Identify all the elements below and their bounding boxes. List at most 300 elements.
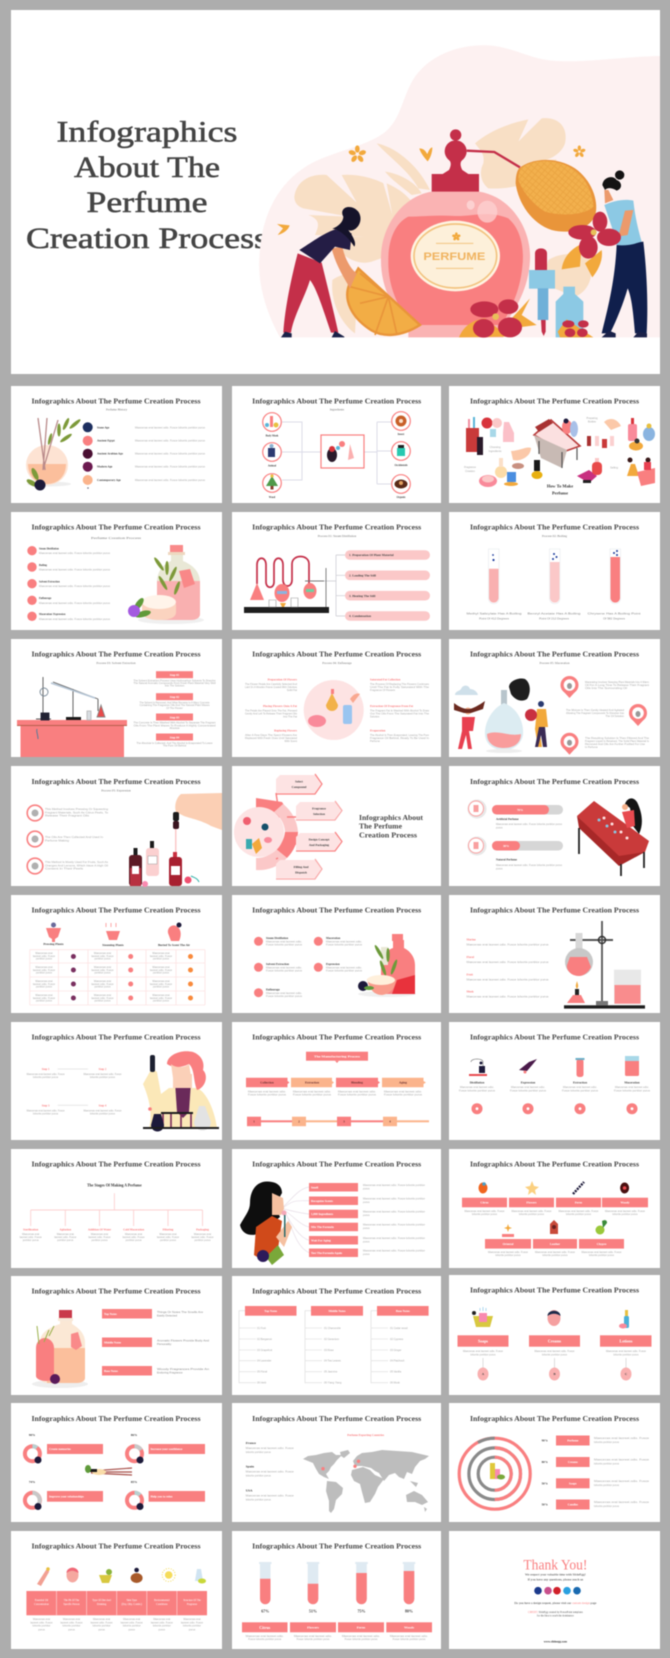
timeline item list: Maecenas erat laoreet odio. Fusce lobortis porttitor purus — [135, 465, 206, 469]
text entries: Musk — [466, 990, 474, 994]
method labels: Extraction — [573, 1081, 587, 1085]
left source icons: Body Musk — [266, 434, 279, 438]
note buttons: Aromatic Flowers Provide Body And — [157, 1338, 209, 1342]
comparison grid: Maecenas erat — [152, 965, 170, 969]
family buttons: Maecenas erat laoreet odio. Fusce — [605, 1209, 646, 1213]
numbered timeline: 4 — [389, 1120, 391, 1124]
test tube 67 percent — [259, 1562, 272, 1614]
step texts: lobortis porttitor purus — [90, 1075, 116, 1079]
numbered timeline: 2 — [298, 1120, 300, 1124]
tube captions: Point Of 212 Degrees — [539, 616, 569, 620]
step buttons: 1,000 Ingredients — [311, 1212, 334, 1216]
pin icons and texts — [560, 676, 650, 755]
comparison grid: Maecenas erat — [94, 993, 111, 997]
step texts: Maecenas erat laoreet odio. Fusce — [84, 1108, 122, 1112]
family buttons: Ferns — [575, 1200, 583, 1204]
category buttons: Maecenas erat laoreet odio. — [342, 1634, 380, 1638]
timeline item list: Maecenas erat laoreet odio. Fusce lobortis porttitor purus — [135, 425, 206, 429]
how to make perfume caption: How To Make — [547, 484, 573, 488]
factor descriptions: lobortis porttitor — [93, 1624, 111, 1628]
right process texts: Perfume — [370, 739, 380, 743]
step buttons: purus — [363, 1200, 370, 1204]
slide title: Infographics About The Perfume Creation Process — [32, 777, 201, 786]
connector lines — [282, 422, 391, 484]
hero title: Creation Process — [26, 223, 268, 255]
pin icons and texts: The Mixture Is Then Gently Heated And Agitated — [566, 708, 625, 712]
comparison grid: laoreet odio. Fusce — [150, 968, 173, 972]
red factor grid: Environmental — [154, 1599, 170, 1602]
blue bottle with flower — [556, 287, 593, 337]
factor descriptions — [30, 1617, 204, 1632]
panel: slide 4 perfume creation process — [11, 512, 222, 630]
percent legend rows: Perfume — [567, 1438, 579, 1442]
panel: slide 3 how to make perfume — [449, 386, 660, 503]
percent legend rows: lobortis porttitor purus — [594, 1504, 620, 1508]
product buttons — [458, 1335, 652, 1356]
natural perfume bar: Maecenas erat laoreet odio. Fusce lobortis porttitor purus — [496, 863, 563, 867]
bottle stem and tube — [467, 151, 520, 167]
right process texts: Extraction Of Fragrance From Fat — [370, 704, 413, 708]
panel: slide 9 maceration — [449, 639, 660, 757]
donut 85 percent: Help you to relax — [150, 1494, 173, 1498]
text entries: Fruit — [466, 972, 473, 976]
base notes column — [377, 1306, 429, 1385]
tube captions — [466, 612, 641, 620]
factor descriptions: Maecenas erat — [183, 1617, 201, 1621]
slide title: Infographics About The Perfume Creation Process — [32, 522, 201, 532]
donut 74 percent — [25, 1480, 103, 1510]
method items: Maecenas erat laoreet odio. — [266, 966, 302, 970]
slide title: Infographics About The Perfume Creation Process — [32, 1542, 201, 1550]
woman left — [281, 207, 361, 337]
method labels: Fusce lobortis porttitor purus — [510, 1088, 547, 1092]
social icons — [534, 1587, 581, 1594]
chevron label 2: Fragrance — [312, 806, 326, 810]
four process segments: Blending — [351, 1080, 363, 1084]
country text blocks: Maecenas erat laoreet odio. Fusce — [246, 1494, 294, 1498]
donut 86 percent: Increase your confidence — [150, 1447, 183, 1451]
test tube 75 percent — [355, 1562, 368, 1614]
natural perfume bar — [468, 836, 563, 870]
chevron label 1: Compound — [292, 785, 307, 789]
slide title: Infographics About The Perfume Creation Process — [252, 1160, 421, 1168]
artificial perfume bar: 70% — [517, 808, 523, 812]
percent legend rows: 50% — [542, 1481, 548, 1485]
donut 86 percent: 86% — [131, 1433, 137, 1437]
slide title: Infographics About The Perfume Creation Process — [252, 522, 421, 532]
test tube 1 — [488, 549, 499, 604]
comparison grid: Maecenas erat — [94, 951, 111, 955]
figure left with flowers — [454, 701, 485, 749]
step buttons: Wait For Aging — [311, 1238, 331, 1242]
timeline item list: Modern Age — [97, 465, 113, 469]
tree labels: porttitor purus — [23, 1238, 39, 1242]
distillation apparatus — [244, 556, 329, 613]
family buttons: Maecenas erat laoreet odio. Fusce — [535, 1250, 576, 1254]
note buttons: Personality — [157, 1342, 172, 1346]
tree labels: Agitation — [60, 1228, 71, 1232]
step texts: Maecenas erat laoreet odio. Fusce — [27, 1072, 65, 1076]
country text blocks: USA — [246, 1488, 253, 1492]
pendant letter markers: A — [482, 1372, 485, 1376]
process step list: Solvent Extraction — [39, 580, 60, 584]
donut 90 percent — [25, 1433, 103, 1464]
right process texts: Fragrance Oil Behind, Ready To Be Used In — [370, 736, 430, 740]
panel: slide 26 exporting countries map — [232, 1403, 441, 1522]
method items: Enfleurage — [266, 988, 280, 992]
comparison grid: laoreet odio. Fusce — [91, 954, 114, 958]
tree labels: laoreet odio. Fusce — [88, 1235, 111, 1239]
slide title: Infographics About The Perfume Creation Process — [32, 1160, 201, 1168]
chevron label 4: Filling And — [294, 865, 309, 869]
thank you heading: Thank You! — [523, 1558, 587, 1574]
panel: slide 23 notes lists — [232, 1276, 441, 1395]
tree labels: Maecenas erat — [194, 1232, 211, 1236]
factor descriptions: laoreet odio. Fusce — [151, 1620, 173, 1624]
step buttons: Maecenas erat laoreet odio. Fusce lobortis porttitor — [363, 1223, 425, 1227]
panel: slide 6 boiling — [449, 512, 660, 630]
step texts: Step 4 — [99, 1103, 107, 1107]
slide title: Infographics About The Perfume Creation Process — [32, 1414, 201, 1423]
middle notes column — [311, 1306, 363, 1385]
factor descriptions: purus — [68, 1628, 75, 1632]
comparison grid: laoreet odio. Fusce — [150, 982, 173, 986]
thank you message: We respect your valuable time with SlideEgg! — [525, 1572, 586, 1576]
percent legend rows: lobortis porttitor purus — [594, 1440, 620, 1444]
numbered timeline: 1 — [253, 1120, 255, 1124]
middle notes column: 02 Geranium — [324, 1337, 339, 1341]
red factor grid: Fragrance — [187, 1603, 198, 1606]
process step list: Boiling — [39, 564, 48, 567]
subtitle: Process 05: Maceration — [540, 661, 570, 665]
note buttons: Easily Detected — [157, 1314, 177, 1318]
timeline item list: Ancient Arabian Age — [97, 452, 124, 456]
right source icons: Occidentals — [395, 464, 407, 467]
method items: Steam Distillation — [266, 936, 288, 940]
family buttons: Maecenas erat laoreet odio. Fusce — [512, 1209, 552, 1213]
factor descriptions: purus — [128, 1628, 136, 1632]
panel: slide 29 test tube chart — [232, 1531, 441, 1649]
test tube 51 percent — [307, 1562, 319, 1614]
right process texts: The Alcohol Is Then Evaporated, Leaving The Pure — [370, 733, 430, 737]
red factor grid: (Dry, Oily, Combo) — [122, 1603, 142, 1606]
panel: slide 8 enfleurage — [232, 639, 441, 757]
step pills: 3. Heating The Still — [349, 594, 375, 598]
subtitle: Ingredients — [330, 408, 345, 412]
subtitle: Process 05: Expression — [101, 788, 131, 792]
tube captions: Point Of 412 Degrees — [479, 616, 509, 620]
family buttons: Maecenas erat laoreet odio. Fusce — [582, 1250, 622, 1254]
isometric perfume scene right — [577, 418, 655, 486]
comparison grid: laoreet odio. Fusce — [150, 954, 173, 958]
method labels: Distillation — [470, 1081, 485, 1085]
country text blocks — [246, 1441, 294, 1502]
orange slice — [347, 268, 420, 335]
product buttons: Maecenas erat laoreet odio. Fusce — [534, 1349, 575, 1353]
hero title: About The — [74, 152, 220, 184]
step buttons: Maecenas erat laoreet odio. Fusce lobortis porttitor — [363, 1210, 425, 1214]
text entries: Maecenas erat laoreet odio. Fusce lobortis porttitor purus — [466, 943, 549, 947]
red factor grid: Conditions — [156, 1603, 167, 1606]
category buttons: Fusce lobortis porttitor purus — [345, 1637, 378, 1641]
donut 85 percent — [127, 1480, 205, 1510]
pin icons and texts: The Oil Solution — [606, 714, 625, 718]
website footer: www.slideegg.com — [544, 1640, 568, 1644]
family buttons: Maecenas erat laoreet odio. Fusce — [488, 1250, 529, 1254]
top notes column: 02 Bergamot — [257, 1337, 272, 1341]
text entries: Maecenas erat laoreet odio. Fusce lobortis porttitor purus — [466, 960, 549, 964]
chevron label 3: Design Concept — [309, 838, 330, 842]
panel: slide 5 steam distillation — [232, 512, 441, 630]
circle bullet items: This Method Involves Pressing Or Squeezing — [45, 807, 109, 811]
test tube 3 — [610, 549, 620, 604]
circle bullet items: The Oils Are Then Collected And Used In — [45, 835, 104, 839]
method labels: Maecenas erat laoreet odio. — [563, 1085, 597, 1089]
step pills: 1. Preparation Of Plant Material — [349, 553, 394, 557]
comparison grid: porttitor purus — [153, 985, 170, 989]
pin icons and texts: Oil For A Long Time To Release Their Fragrant — [585, 683, 649, 687]
category buttons: Fusce lobortis porttitor purus — [248, 1637, 282, 1641]
slide title: Infographics About The Perfume Creation Process — [252, 906, 421, 914]
step texts: Maecenas erat laoreet odio. Fusce — [27, 1108, 65, 1112]
tree labels: Maecenas erat — [22, 1232, 40, 1236]
slide title: Infographics About The Perfume Creation Process — [470, 396, 639, 406]
four process segments: Fusce lobortis porttitor purus — [293, 1092, 332, 1096]
product buttons: lobortis porttitor purus — [613, 1352, 639, 1356]
pin icons and texts: Removed And Oils Are Further Purified For Use — [585, 742, 646, 746]
red factor grid: Drinking — [97, 1603, 107, 1606]
chevron label 1: Select — [295, 780, 304, 784]
slide title: Infographics About The Perfume Creation Process — [32, 906, 201, 914]
pendant letter markers: B — [553, 1372, 556, 1376]
how to make perfume caption: Selling — [610, 466, 618, 470]
percent legend rows: Creams — [568, 1460, 579, 1464]
timeline item list: Ancient Egypt — [97, 439, 115, 443]
left process texts: Into The Fat — [283, 714, 297, 718]
note buttons: Woody Fragrances Provide An — [157, 1367, 210, 1371]
credit text: for the Idea to reach the dominance — [537, 1614, 575, 1617]
category buttons: Citrus — [259, 1625, 271, 1630]
artificial perfume bar: Maecenas erat laoreet odio. Fusce lobortis porttitor purus — [496, 822, 563, 826]
percent legend rows — [542, 1436, 650, 1510]
note buttons: Enduring Fragrance — [157, 1370, 183, 1374]
top notes column — [245, 1306, 296, 1385]
chevron label 4 — [276, 859, 322, 879]
category buttons: Flowers — [307, 1626, 320, 1630]
bracket lines — [239, 1311, 388, 1383]
percent legend rows: lobortis porttitor purus — [594, 1462, 620, 1466]
circle bullet items: This Method Is Mostly Used For Fruits, Such As — [45, 860, 109, 864]
process step list — [27, 546, 111, 621]
red factor grid: The Ph Of The — [64, 1599, 80, 1602]
bottle and jar illustration — [358, 934, 416, 997]
tree labels: porttitor purus — [160, 1238, 177, 1242]
process step list: Maceration/ Expression — [39, 613, 66, 616]
step buttons with text: The Natural Aromatic Compounds From Fresh Plant Material Very Well — [134, 681, 216, 685]
method items: Fusce lobortis porttitor purus — [326, 943, 363, 947]
tube captions: Of 582 Degrees — [603, 616, 625, 620]
ring center bottle icon — [490, 1463, 505, 1480]
family buttons: Chypre — [597, 1242, 607, 1246]
donut 86 percent — [127, 1433, 205, 1464]
red factor grid — [26, 1591, 207, 1615]
step buttons: Test The Formula Again — [311, 1251, 342, 1255]
panel: slide 21 fragrance families — [449, 1149, 660, 1268]
left process texts: Replaced With Fresh Ones Until Saturated — [245, 736, 298, 740]
comparison grid: Maecenas erat — [94, 979, 111, 983]
four process segments: Aging — [399, 1080, 407, 1084]
country text blocks: lobortis porttitor purus — [246, 1450, 271, 1454]
percent legend rows: lobortis porttitor purus — [594, 1483, 620, 1487]
comparison grid: laoreet odio. Fusce — [91, 968, 114, 972]
panel: slide 28 six factors — [11, 1531, 222, 1649]
step buttons with text: Step 03 — [170, 716, 180, 720]
comparison grid: Maecenas erat — [35, 979, 53, 983]
pin icons and texts: Oils Into The Surrounding Oil — [585, 686, 628, 690]
column icons and headings: Pressing Plants — [43, 942, 64, 946]
tree labels: porttitor purus — [91, 1238, 108, 1242]
isometric perfume scene left — [466, 417, 542, 487]
panel: slide 25 donut charts benefits — [11, 1403, 222, 1522]
slide title: Infographics About The Perfume Creation Process — [470, 906, 639, 914]
process step list: Maecenas erat laoreet odio. Fusce lobortis porttitor purus — [39, 601, 111, 605]
tree labels: porttitor purus — [194, 1238, 211, 1242]
panel: slide 15 scent notes with lab stand — [449, 895, 660, 1013]
step buttons: Mix The Formula — [311, 1225, 334, 1229]
natural perfume bar: Natural Perfume — [496, 858, 518, 862]
subtitle: Process 03: Solvent Extraction — [96, 661, 136, 665]
factor descriptions: lobortis porttitor — [33, 1624, 51, 1628]
panel: slide 11 process chevrons — [232, 766, 441, 886]
factor icons — [37, 1567, 206, 1586]
timeline item list: Stone Age — [97, 425, 110, 429]
slide title: Infographics About The Perfume Creation Process — [252, 1032, 421, 1042]
woman right — [602, 170, 647, 337]
timeline item list: Maecenas erat laoreet odio. Fusce lobortis porttitor purus — [135, 452, 206, 456]
four process segments: Collection — [260, 1080, 274, 1084]
country text blocks: lobortis porttitor purus — [246, 1474, 271, 1478]
text entries: Maecenas erat laoreet odio. Fusce lobortis porttitor purus — [466, 977, 549, 981]
comparison grid: porttitor purus — [153, 999, 170, 1003]
country text blocks: Maecenas erat laoreet odio. Fusce — [246, 1446, 294, 1450]
red factor grid: Structure Of The — [183, 1599, 202, 1602]
step buttons: Maecenas erat laoreet odio. Fusce lobortis porttitor — [363, 1236, 425, 1240]
pin icons and texts: The Resulting Solution Is Then Filtered And The — [585, 736, 650, 740]
credit text: CREDIT: SlideEgg created by PowerPoint templates — [528, 1611, 583, 1614]
right process texts: Until The Fat Is Fully Saturated With The — [370, 685, 430, 689]
slide title: Infographics About The Perfume Creation Process — [252, 1286, 421, 1296]
four process segments — [246, 1078, 426, 1096]
tree labels: laoreet odio. Fusce — [157, 1235, 180, 1239]
process step list: Steam Distillation — [39, 548, 59, 550]
tree labels: Filtering — [163, 1228, 174, 1232]
slide title: Infographics About The Perfume Creation Process — [470, 777, 639, 786]
text entries: Floral — [466, 955, 474, 959]
timeline item list: Maecenas erat laoreet odio. Fusce lobortis porttitor purus — [135, 439, 206, 443]
step buttons with text: Containing The Fragrance Oils And The Natural Plant Waxes — [140, 703, 210, 707]
panel: slide 7 solvent extraction — [11, 639, 222, 757]
letter circles — [472, 1103, 638, 1114]
middle notes column: Middle Notes — [328, 1309, 346, 1313]
connector lines — [324, 555, 345, 616]
middle notes column: 04 Tea Leaves — [324, 1359, 342, 1363]
hand with dropper — [173, 793, 222, 853]
right process texts: Solution — [370, 714, 380, 718]
comparison grid: Maecenas erat — [35, 951, 53, 955]
family buttons: lobortis porttitor purus — [566, 1212, 592, 1216]
process step list: Maecenas erat laoreet odio. Fusce lobortis porttitor purus — [39, 568, 111, 572]
test tube 2 — [550, 549, 560, 604]
lab stand illustration — [564, 921, 645, 1009]
left process texts — [245, 678, 298, 743]
category buttons: Maecenas erat laoreet odio. — [246, 1634, 284, 1638]
four process segments: Extraction — [305, 1080, 319, 1084]
factor descriptions: lobortis porttitor — [183, 1624, 201, 1628]
bottom flower and dropper — [459, 298, 537, 338]
thank you message: If you have any questions, please reach us — [528, 1578, 584, 1582]
step buttons with text: The Concrete Is Then Washed With Alcohol To Separate The Fragrant — [134, 721, 216, 725]
method labels: Expression — [521, 1081, 536, 1085]
panel: slide 17 manufacturing process — [232, 1022, 441, 1140]
comparison grid: porttitor purus — [153, 957, 170, 961]
slide title: Infographics About The Perfume Creation Process — [470, 1160, 639, 1168]
factor descriptions: Maecenas erat — [33, 1617, 50, 1621]
panel: slide 19 stages tree — [11, 1149, 222, 1268]
product buttons: lobortis porttitor purus — [542, 1352, 568, 1356]
left source icons: Wood — [269, 496, 276, 499]
tree labels: laoreet odio. Fusce — [20, 1235, 42, 1239]
comparison grid: Maecenas erat — [152, 979, 170, 983]
left process texts: Preparation Of Flowers — [268, 678, 298, 682]
step buttons with text: Step 02 — [170, 695, 180, 699]
method labels: Maceration — [624, 1081, 640, 1085]
center diffuser sticks — [85, 1465, 132, 1475]
step buttons: purus — [363, 1252, 370, 1256]
hero title: Perfume — [86, 187, 208, 219]
slide title: Infographics About The Perfume Creation Process — [252, 650, 421, 658]
method labels: Maecenas erat laoreet odio. — [460, 1085, 494, 1089]
connecting curves — [282, 1187, 309, 1253]
chevron label 1 — [276, 774, 322, 794]
slide title: Infographics About The Perfume Creation Process — [470, 1032, 639, 1042]
donut 90 percent: 90% — [29, 1433, 35, 1437]
note buttons — [102, 1309, 210, 1376]
perfume label: PERFUME — [423, 251, 485, 263]
dropper — [529, 248, 555, 336]
natural perfume bar: 30% — [503, 844, 509, 848]
top notes column: 05 Floral — [257, 1370, 268, 1374]
chevron label 2: Selection — [313, 812, 325, 816]
panel: slide 2 ingredients — [232, 386, 441, 503]
panel: slide 12 artificial vs natural perfume — [449, 766, 660, 886]
right source icons: Organic — [396, 496, 406, 499]
middle notes column: 05 Jasmine — [324, 1370, 338, 1374]
thank you message — [525, 1572, 586, 1582]
concentric ring chart — [459, 1438, 530, 1509]
large bottle illustration — [32, 1310, 88, 1388]
note buttons: Base Notes — [104, 1369, 119, 1373]
timeline item list — [83, 422, 206, 489]
pendant letter markers — [478, 1358, 632, 1380]
factor descriptions: laoreet odio. Fusce — [181, 1620, 204, 1624]
step buttons with text: The Absolute Is Collected, And The Alcohol Is Evaporated To Leave — [136, 741, 213, 745]
product buttons: Soaps — [478, 1338, 488, 1344]
slide title: Infographics About The Perfume Creation Process — [252, 396, 421, 406]
tree labels: laoreet odio. Fusce — [191, 1235, 214, 1239]
step buttons: Maecenas erat laoreet odio. Fusce lobortis porttitor — [363, 1196, 425, 1200]
family buttons: Maecenas erat laoreet odio. Fusce — [558, 1209, 599, 1213]
slide title: Infographics About The Perfume Creation Process — [470, 522, 639, 532]
